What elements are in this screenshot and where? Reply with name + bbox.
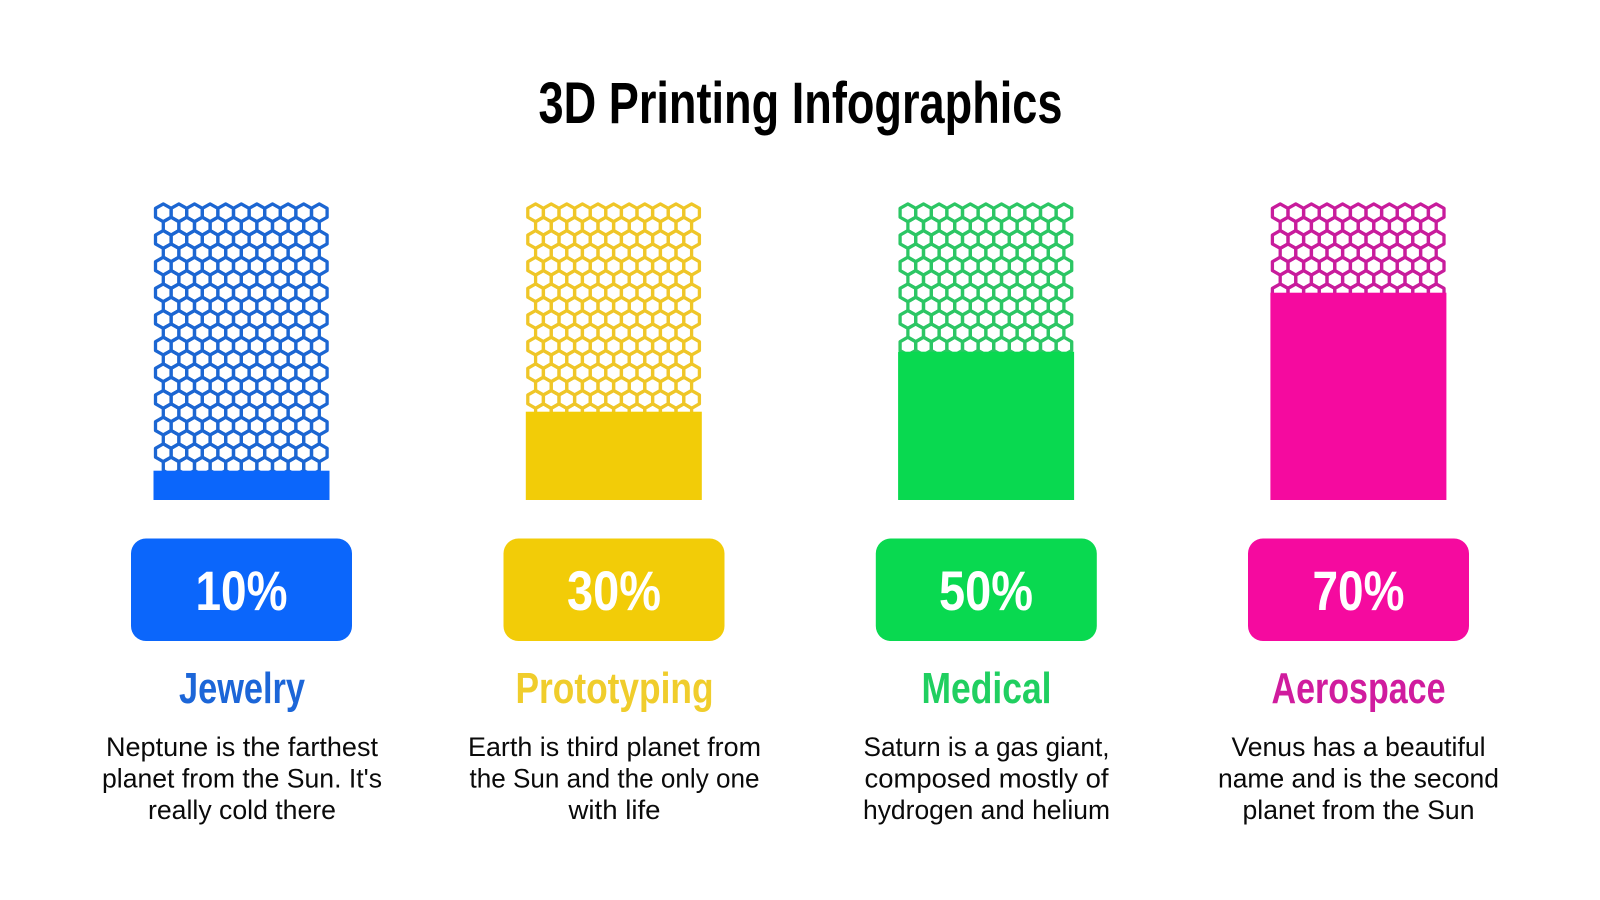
panel: Aerospace (1218, 204, 1499, 825)
badge: 70%: 70% (1312, 559, 1404, 622)
text block: Jewelry description (102, 732, 382, 825)
heading: Aerospace: Aerospace (1272, 664, 1446, 713)
chart: Medical infill bar 50% (898, 204, 1074, 500)
text block: Medical description: hydrogen and helium (863, 795, 1110, 825)
badge: 10%: 10% (196, 559, 288, 622)
panel: Medical (863, 204, 1110, 825)
badge: 30%: 30% (567, 559, 661, 622)
text block: Jewelry description: really cold there (148, 795, 336, 825)
heading: Jewelry: Jewelry (179, 664, 305, 713)
badge: 30% (504, 538, 724, 641)
chart: Prototyping infill bar 30% (526, 204, 702, 500)
badge: 50% (876, 538, 1097, 641)
text block: Aerospace description: name and is the second (1218, 764, 1499, 794)
panel: Prototyping (468, 204, 761, 825)
panel: Jewelry (102, 204, 382, 825)
text block: Jewelry description: planet from the Sun. It's (102, 764, 382, 794)
title: 3D Printing Infographics (538, 71, 1062, 136)
text block: Aerospace description (1218, 732, 1499, 825)
text block: Prototyping description (468, 732, 761, 825)
text block: Aerospace description: planet from the Sun (1242, 795, 1474, 825)
chart: Jewelry infill bar 10% (154, 204, 330, 500)
text block: Prototyping description: with life (567, 795, 660, 825)
badge: 10% (131, 538, 352, 641)
text block: Aerospace description: Venus has a beautiful (1232, 732, 1486, 762)
text block: Prototyping description: the Sun and the only one (470, 764, 760, 794)
text block: Medical description (863, 732, 1110, 825)
text block: Medical description: composed mostly of (864, 764, 1109, 794)
heading: Medical: Medical (922, 664, 1052, 713)
text block: Prototyping description: Earth is third planet from (468, 732, 761, 762)
chart: Aerospace infill bar 70% (1270, 204, 1446, 500)
badge: 50%: 50% (939, 559, 1033, 622)
badge: 70% (1248, 538, 1469, 641)
text block: Medical description: Saturn is a gas giant, (864, 732, 1110, 762)
heading: Prototyping: Prototyping (516, 664, 714, 713)
text block: Jewelry description: Neptune is the farthest (106, 732, 378, 762)
